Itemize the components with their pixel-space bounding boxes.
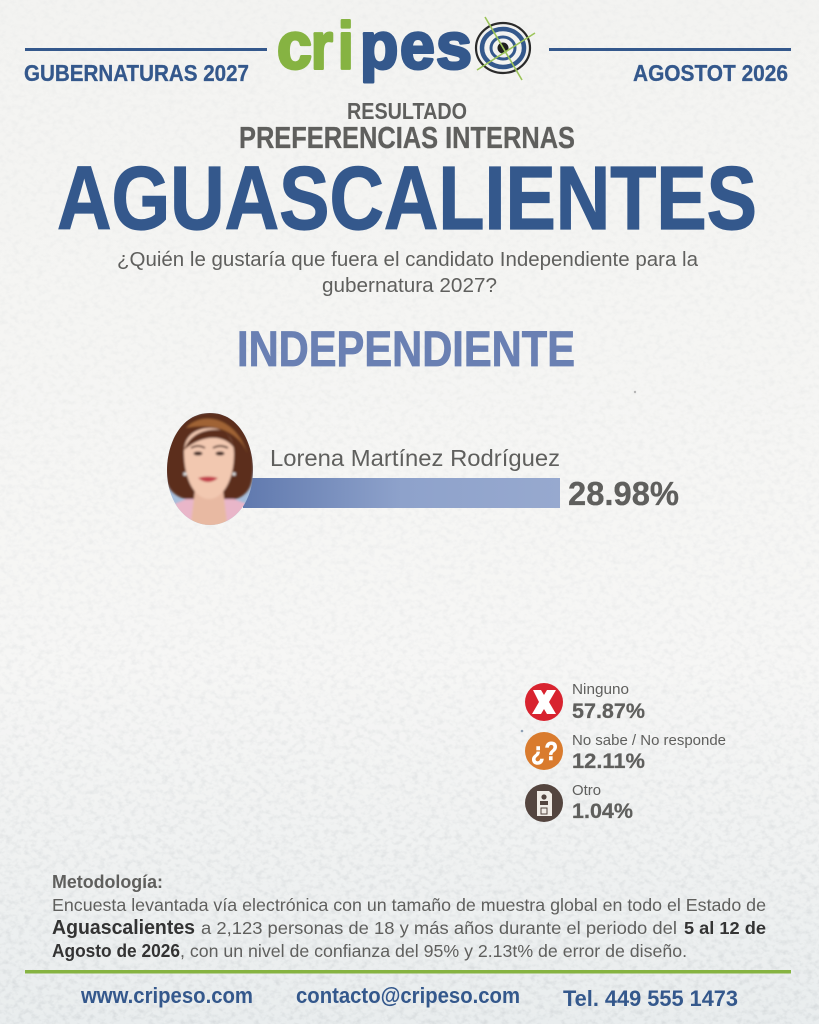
methodology text: a 2,123 personas de 18 y más años durante el periodo del xyxy=(201,918,677,938)
bar value: 28.98% xyxy=(568,475,679,512)
value: 57.87% xyxy=(572,699,645,723)
legend: ninguno xyxy=(525,682,645,723)
website: www.cripeso.com xyxy=(80,983,253,1008)
methodology text: 5 al 12 de xyxy=(684,918,766,938)
icon: red x xyxy=(525,683,563,721)
bar xyxy=(243,478,560,508)
methodology text: , con un nivel de confianza del 95% y 2.13t% de error de diseño. xyxy=(180,941,687,961)
party heading: INDEPENDIENTE xyxy=(237,321,575,377)
methodology heading: Metodología: xyxy=(52,872,163,892)
email: contacto@cripeso.com xyxy=(296,983,520,1008)
logo target icon xyxy=(476,17,535,80)
paper background xyxy=(0,390,819,1024)
candidate portrait xyxy=(167,413,253,525)
survey question: ¿Quién le gustaría que fuera el candidato Independiente para la xyxy=(117,249,699,271)
methodology text: Encuesta levantada vía electrónica con un tamaño de muestra global en todo el Estado de xyxy=(52,895,766,915)
methodology text xyxy=(52,895,766,961)
label: No sabe / No responde xyxy=(572,733,726,749)
methodology xyxy=(52,872,766,961)
candidate name: Lorena Martínez Rodríguez xyxy=(270,445,560,471)
label: Otro xyxy=(572,783,601,799)
logo wordmark: e xyxy=(400,9,435,83)
icon: ballot xyxy=(525,784,563,822)
candidate bar: Lorena Martínez Rodríguez xyxy=(165,410,679,530)
survey question: gubernatura 2027? xyxy=(322,275,497,297)
subtitle: resultado: RESULTADO xyxy=(347,98,467,124)
value: 12.11% xyxy=(572,749,645,773)
header right label: AGOSTOT 2026 xyxy=(633,60,788,86)
header rule right xyxy=(549,48,791,51)
footer rule xyxy=(25,970,791,974)
footer contact xyxy=(80,983,738,1011)
methodology text: Aguascalientes xyxy=(52,917,195,939)
survey question xyxy=(117,249,699,297)
logo wordmark: s xyxy=(436,9,472,83)
logo wordmark: i xyxy=(338,9,354,83)
logo wordmark: r xyxy=(311,9,333,83)
logo wordmark xyxy=(277,9,472,83)
header rule left xyxy=(25,48,267,51)
icon: question mark: ¿? xyxy=(531,736,558,766)
label: Ninguno xyxy=(572,682,629,698)
legend: no sabe / no responde xyxy=(525,732,726,773)
value: 1.04% xyxy=(572,799,633,823)
logo wordmark: c xyxy=(277,9,312,83)
legend: otro xyxy=(525,783,633,823)
icon: question mark xyxy=(525,732,563,770)
phone: Tel. 449 555 1473 xyxy=(563,986,738,1011)
logo: cripeso xyxy=(277,9,535,83)
logo wordmark: p xyxy=(360,9,398,83)
methodology text: Agosto de 2026 xyxy=(52,941,180,961)
subtitle: preferencias internas: PREFERENCIAS INTERNAS xyxy=(239,121,575,155)
header left label: GUBERNATURAS 2027 xyxy=(24,60,249,86)
